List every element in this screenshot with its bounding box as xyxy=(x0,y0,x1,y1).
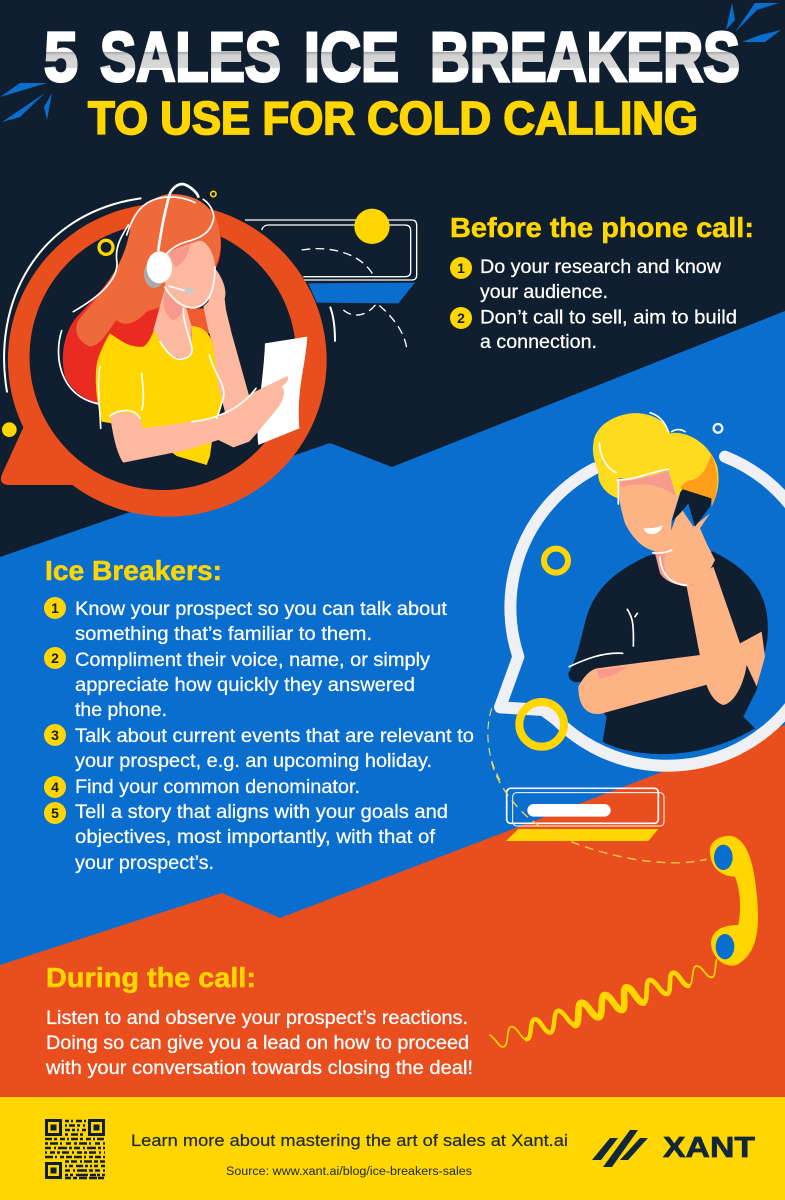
data modules xyxy=(45,1121,105,1178)
title xyxy=(44,18,740,96)
decorative shards: top right xyxy=(726,3,781,42)
logo: XANT xyxy=(592,1130,755,1167)
subtitle: TO USE FOR COLD CALLING xyxy=(88,92,698,144)
background: blue section xyxy=(0,311,785,1000)
paper xyxy=(258,337,307,445)
item 3: Talk about current events that are relevant to xyxy=(75,726,474,747)
heading: ice breakers: Ice Breakers: xyxy=(45,555,222,586)
face xyxy=(165,241,215,308)
orange speech bubble ring xyxy=(1,203,327,517)
hair front xyxy=(76,194,221,347)
item 5: Tell a story that aligns with your goals and xyxy=(75,802,448,823)
face shadow xyxy=(168,243,191,267)
footer band xyxy=(0,1097,785,1200)
earpiece xyxy=(714,845,733,870)
white bar xyxy=(527,804,611,817)
bubble outline xyxy=(500,457,785,766)
line work xyxy=(59,197,256,428)
yellow ring xyxy=(99,240,113,254)
blue card base xyxy=(308,283,415,303)
item 1 xyxy=(75,599,448,645)
yellow card base xyxy=(506,829,658,841)
headband xyxy=(158,184,198,250)
hair back xyxy=(63,194,221,403)
badge 3 xyxy=(44,724,66,746)
illustration: telephone handset and card xyxy=(490,762,758,1047)
neck shadow xyxy=(163,290,184,320)
item 4: Find your common denominator. xyxy=(75,777,360,798)
crossed forearm xyxy=(578,655,712,714)
ear cup xyxy=(147,251,172,283)
small yellow ring xyxy=(211,191,216,197)
mouthpiece xyxy=(716,934,734,959)
item 2 xyxy=(75,650,431,721)
ear cup shadow xyxy=(144,260,165,288)
decorative shards: left xyxy=(0,83,52,122)
badge 1 xyxy=(44,597,66,619)
item 1: your audience. xyxy=(480,282,608,303)
hair by neck xyxy=(185,308,211,333)
paragraph: during the call xyxy=(45,1008,473,1079)
background: orange section xyxy=(0,725,785,1100)
dashed line xyxy=(488,708,500,780)
outer arc line xyxy=(4,198,141,392)
badge 2: 2 xyxy=(457,310,465,326)
paragraph: during the call: Doing so can give you a lead on how to proceed xyxy=(46,1033,469,1054)
card inner outline xyxy=(513,793,664,826)
yellow ring xyxy=(544,549,568,573)
microphone arm xyxy=(168,286,185,291)
source: Source: www.xant.ai/blog/ice-breakers-sales xyxy=(226,1166,472,1178)
handset xyxy=(710,836,758,966)
badge 2 xyxy=(450,307,472,329)
smile xyxy=(643,525,663,534)
hair highlight xyxy=(680,455,717,507)
item 2: a connection. xyxy=(480,332,597,353)
yellow sun dot xyxy=(354,209,390,244)
logo wordmark: XANT xyxy=(663,1132,755,1164)
badge 1 xyxy=(450,257,472,279)
item 5: your prospect’s. xyxy=(75,853,214,874)
face xyxy=(618,470,680,552)
raised arm xyxy=(687,567,765,705)
finder patterns xyxy=(45,1119,105,1179)
large yellow ring xyxy=(519,702,564,747)
badge 5 xyxy=(44,802,66,824)
heading: during the call: During the call: xyxy=(46,962,256,993)
title: ICE xyxy=(304,18,399,96)
badge 2: 2 xyxy=(51,650,59,666)
item 3: your prospect, e.g. an upcoming holiday. xyxy=(75,751,432,772)
bubble fill xyxy=(511,451,785,764)
item 2: Compliment their voice, name, or simply xyxy=(75,650,431,671)
item 2: appreciate how quickly they answered xyxy=(75,675,415,696)
list: ice breakers xyxy=(44,597,474,874)
forearm with pointing hand xyxy=(110,376,288,463)
hair xyxy=(593,413,719,507)
paragraph: during the call: Listen to and observe your prospect’s reactions. xyxy=(46,1008,468,1029)
QR code xyxy=(45,1119,105,1179)
raised arm xyxy=(203,268,249,418)
item 2: Don’t call to sell, aim to build xyxy=(480,308,737,328)
logo slashes xyxy=(592,1130,648,1167)
badge 5: 5 xyxy=(51,805,59,821)
phone xyxy=(672,488,712,527)
title: 5 xyxy=(44,18,78,96)
item 1 xyxy=(480,257,721,303)
yellow dot xyxy=(2,422,17,437)
illustration: woman call agent in speech bubble xyxy=(1,184,417,517)
neck xyxy=(153,288,192,359)
forearm shadow xyxy=(597,667,627,678)
call to action: Learn more about mastering the art of sales at Xant.ai xyxy=(131,1131,568,1150)
badge 3: 3 xyxy=(51,727,59,743)
badge 1: 1 xyxy=(51,600,59,616)
title: SALES xyxy=(100,18,281,96)
forehead shadow xyxy=(620,472,677,497)
line work xyxy=(569,413,687,667)
item 1: Know your prospect so you can talk about xyxy=(75,599,448,620)
badge 4: 4 xyxy=(51,779,59,795)
navy shirt xyxy=(568,552,768,754)
item 2: the phone. xyxy=(75,700,167,721)
white accent stroke xyxy=(330,307,335,342)
item 1: Do your research and know xyxy=(480,257,721,278)
neck xyxy=(653,547,693,585)
badge 4 xyxy=(44,776,66,798)
item 1: something that’s familiar to them. xyxy=(75,624,372,645)
window card outlines xyxy=(245,220,417,280)
item 5 xyxy=(75,802,448,874)
small white ring xyxy=(714,424,722,433)
microphone xyxy=(184,288,194,294)
heading: before the phone call: Before the phone call: xyxy=(450,212,754,243)
list: before the phone call xyxy=(450,257,737,353)
hand xyxy=(664,507,715,587)
item 3 xyxy=(75,726,474,772)
item 2 xyxy=(480,308,737,353)
headset xyxy=(144,184,198,294)
badge 2 xyxy=(44,647,66,669)
dashed line xyxy=(492,762,707,863)
dashed curves xyxy=(302,249,407,348)
illustration: man on phone in speech bubble xyxy=(488,413,785,780)
paragraph: during the call: with your conversation towards closing the deal! xyxy=(45,1058,473,1079)
badge 1: 1 xyxy=(457,260,465,276)
coiled cord xyxy=(490,960,717,1047)
yellow shirt xyxy=(96,326,223,465)
item 5: objectives, most importantly, with that of xyxy=(75,827,436,848)
card outer outline xyxy=(507,788,658,823)
